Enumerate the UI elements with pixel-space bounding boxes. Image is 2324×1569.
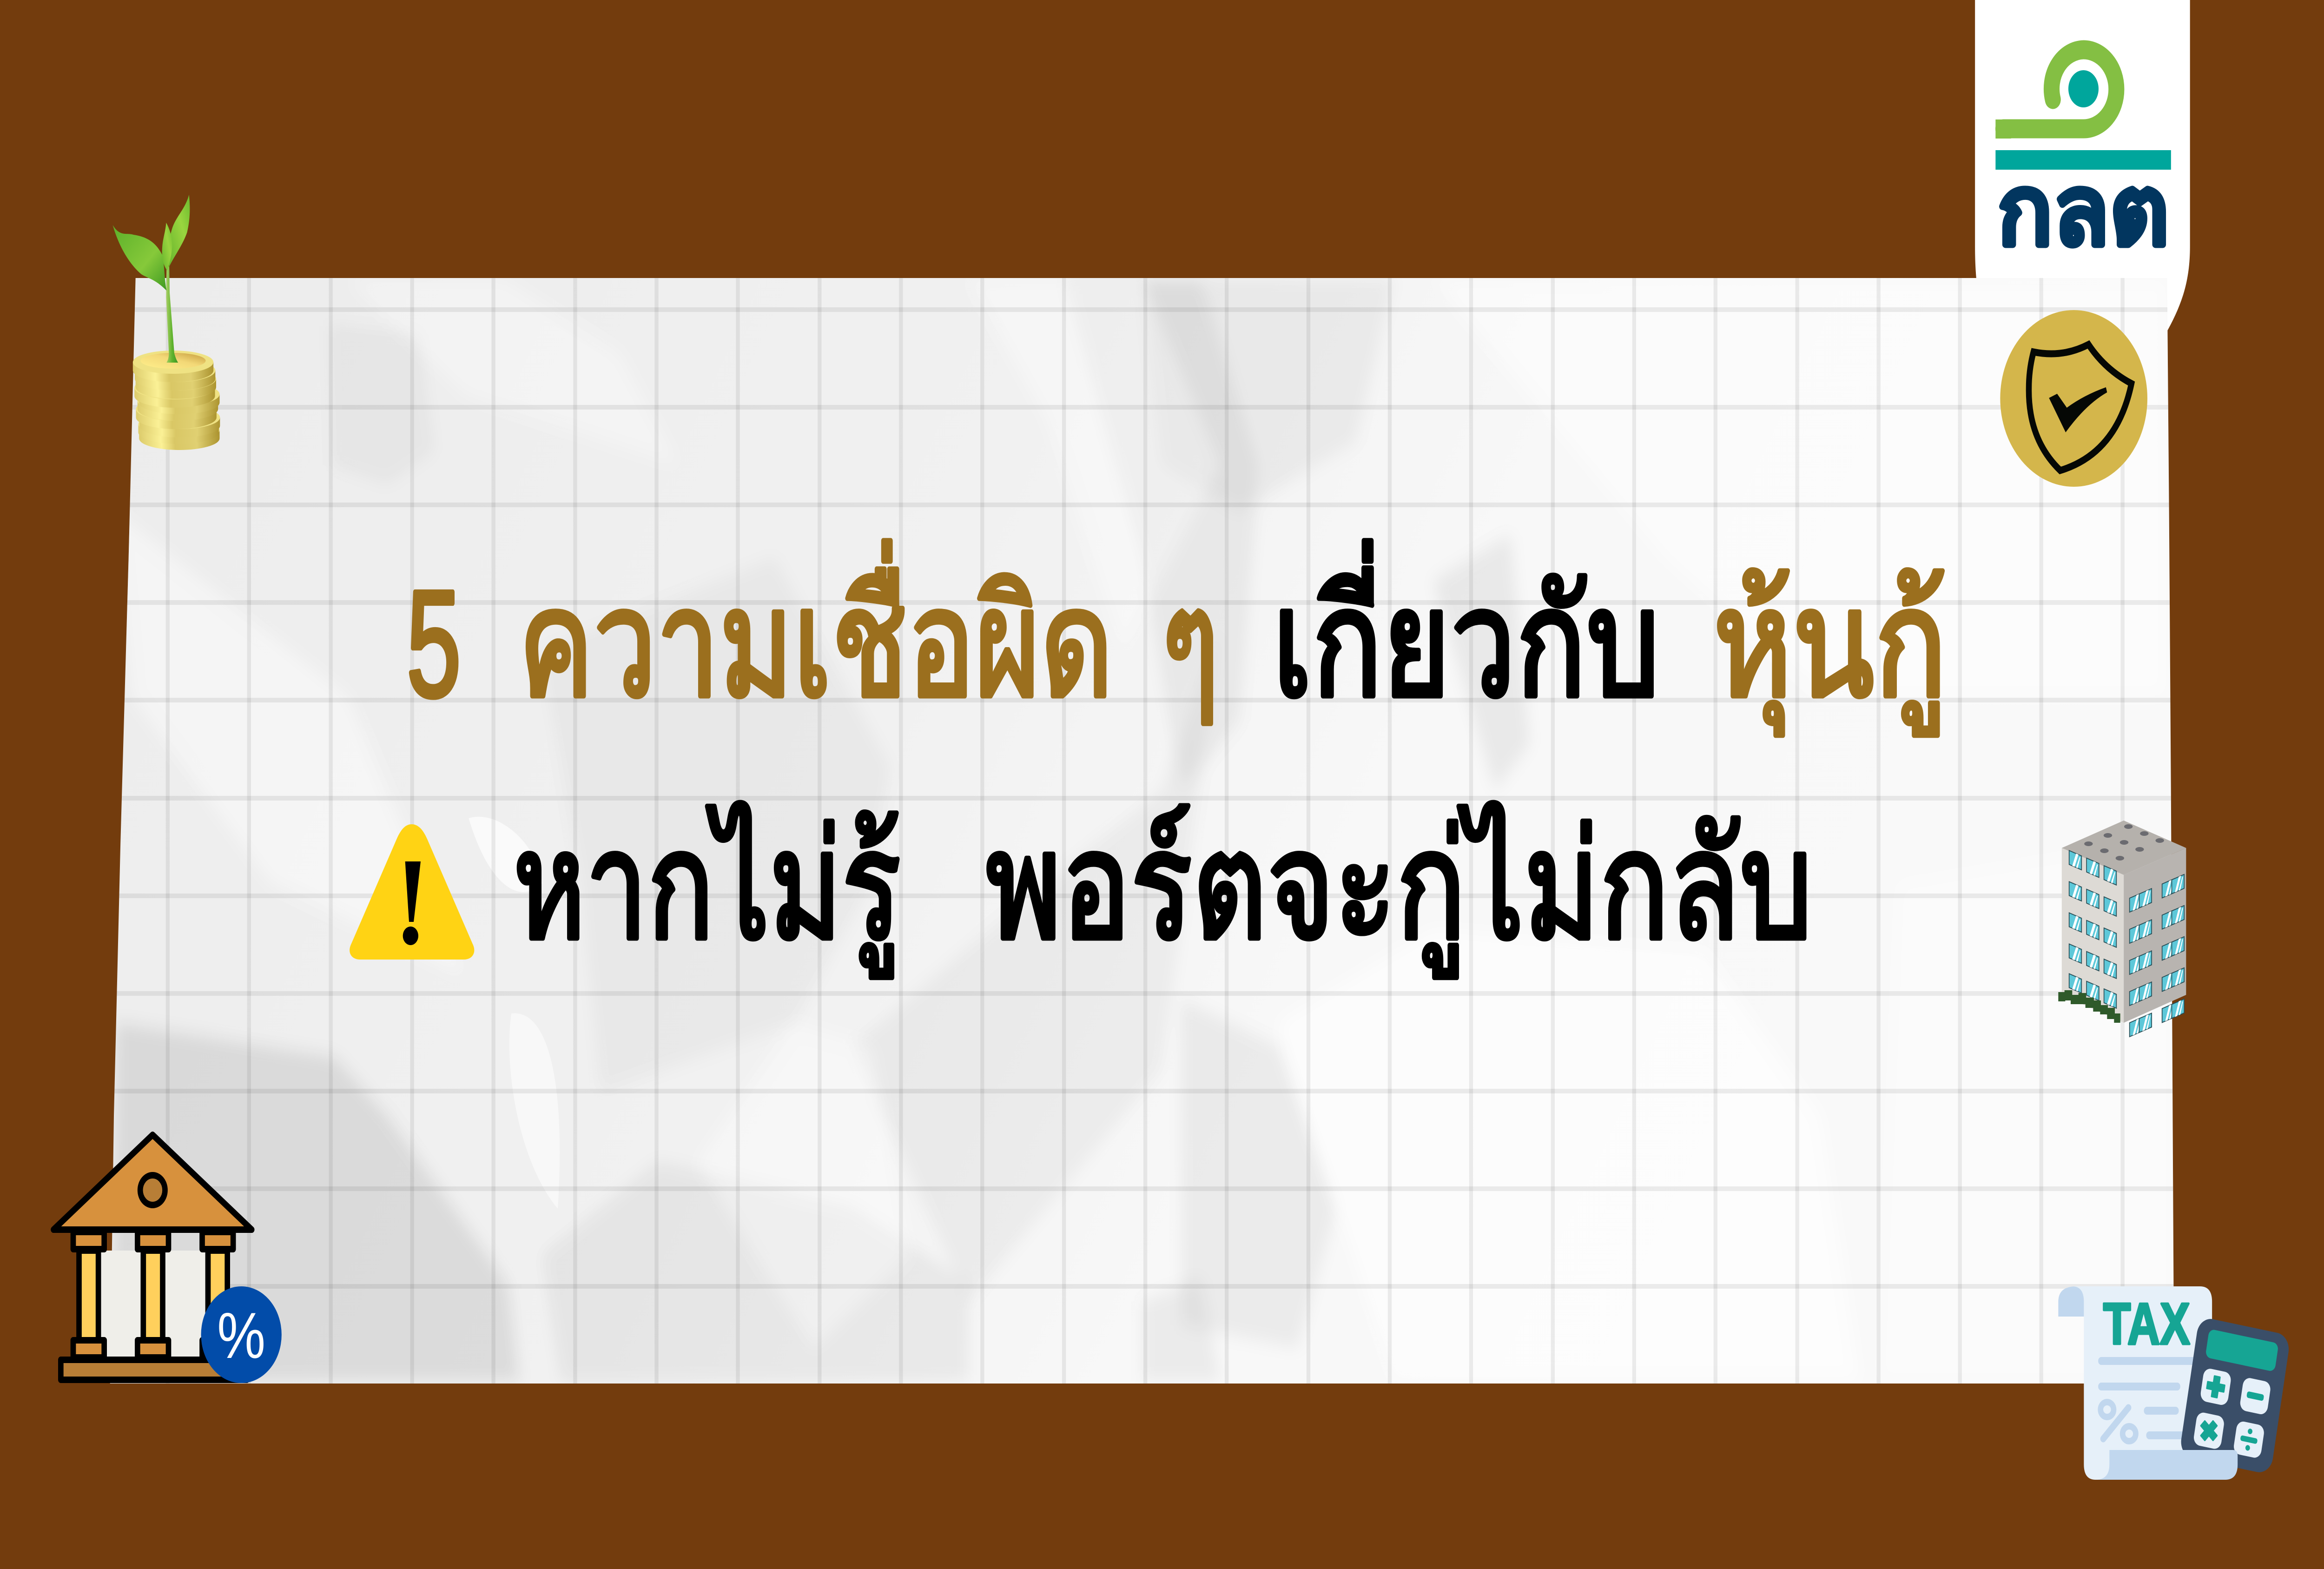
- key minus: [2239, 1377, 2271, 1416]
- tax percent mark: [2100, 1402, 2136, 1441]
- logo wordmark: กลต: [1997, 156, 2169, 266]
- check mark: [2049, 387, 2107, 432]
- calculator: [2179, 1316, 2291, 1475]
- number 5: 5: [407, 560, 461, 728]
- icon: seedling on coin stack: [112, 195, 220, 450]
- logo swirl: [2003, 50, 2116, 129]
- phrase: about: เกี่ยวกับ: [1273, 540, 1660, 728]
- icon: shield check badge: [2000, 310, 2147, 487]
- title line 1: [407, 540, 1947, 736]
- icon: bank with percent badge: [53, 1135, 282, 1383]
- right wall windows: [2130, 874, 2184, 1037]
- tax sheet curl: [2058, 1286, 2092, 1317]
- seedling middle leaf: [162, 223, 172, 271]
- logo dot: [2068, 70, 2099, 107]
- capitals: [73, 1232, 233, 1357]
- seedling left leaf: [112, 225, 166, 291]
- tax sheet: [2072, 1286, 2238, 1480]
- left wall windows: [2069, 850, 2116, 1008]
- logo bar start: [1995, 119, 2011, 139]
- roof units: [2084, 824, 2164, 861]
- key divide: [2233, 1420, 2265, 1459]
- title line 2: [513, 801, 1813, 978]
- phrase: if you do not know: หากไม่รู้: [513, 801, 901, 978]
- calculator screen: [2205, 1329, 2279, 1372]
- logo card: SEC: [1975, 0, 2190, 335]
- seedling stem: [166, 266, 178, 363]
- icon: warning triangle: [350, 824, 474, 960]
- phrase: debentures: หุ้นกู้: [1713, 560, 1947, 736]
- column left: [79, 1251, 99, 1341]
- seedling right leaf: [169, 195, 190, 267]
- key plus: [2199, 1367, 2232, 1406]
- percent badge: [201, 1286, 282, 1383]
- bank pediment: [53, 1135, 252, 1230]
- panel: crumpled grid paper: [108, 278, 2177, 1384]
- logo stripe: [1995, 150, 2171, 170]
- building right wall: [2124, 848, 2186, 1023]
- pediment oculus: [140, 1175, 165, 1205]
- icon: office building: [2058, 821, 2186, 1037]
- exclamation dot: [403, 927, 418, 945]
- bank base: [61, 1360, 247, 1380]
- repeat mark: ๆ: [1161, 560, 1219, 728]
- grid lines: [108, 278, 2177, 1384]
- building roof: [2062, 821, 2186, 875]
- hedge: [2058, 990, 2120, 1023]
- crumple shading: [112, 279, 2173, 1381]
- column center: [143, 1251, 163, 1341]
- coin stack: [133, 351, 220, 450]
- shield outline: [2029, 344, 2132, 470]
- percent badge: %: [217, 1299, 265, 1372]
- tax sheet bottom fold: [2095, 1450, 2238, 1480]
- bank back wall: [97, 1251, 229, 1362]
- icon: tax document with calculator: [2058, 1286, 2291, 1480]
- phrase: portfolio will not recover: พอร์ตจะกู่ไม่กลับ: [986, 801, 1813, 978]
- key times: [2193, 1411, 2225, 1450]
- tax label: TAX: [2103, 1291, 2190, 1357]
- building left wall: [2062, 848, 2124, 1023]
- exclamation bar: [405, 861, 421, 922]
- column right: [208, 1251, 227, 1341]
- phrase: wrong beliefs: ความเชื่อผิด: [519, 540, 1113, 728]
- tax lines: [2098, 1357, 2205, 1439]
